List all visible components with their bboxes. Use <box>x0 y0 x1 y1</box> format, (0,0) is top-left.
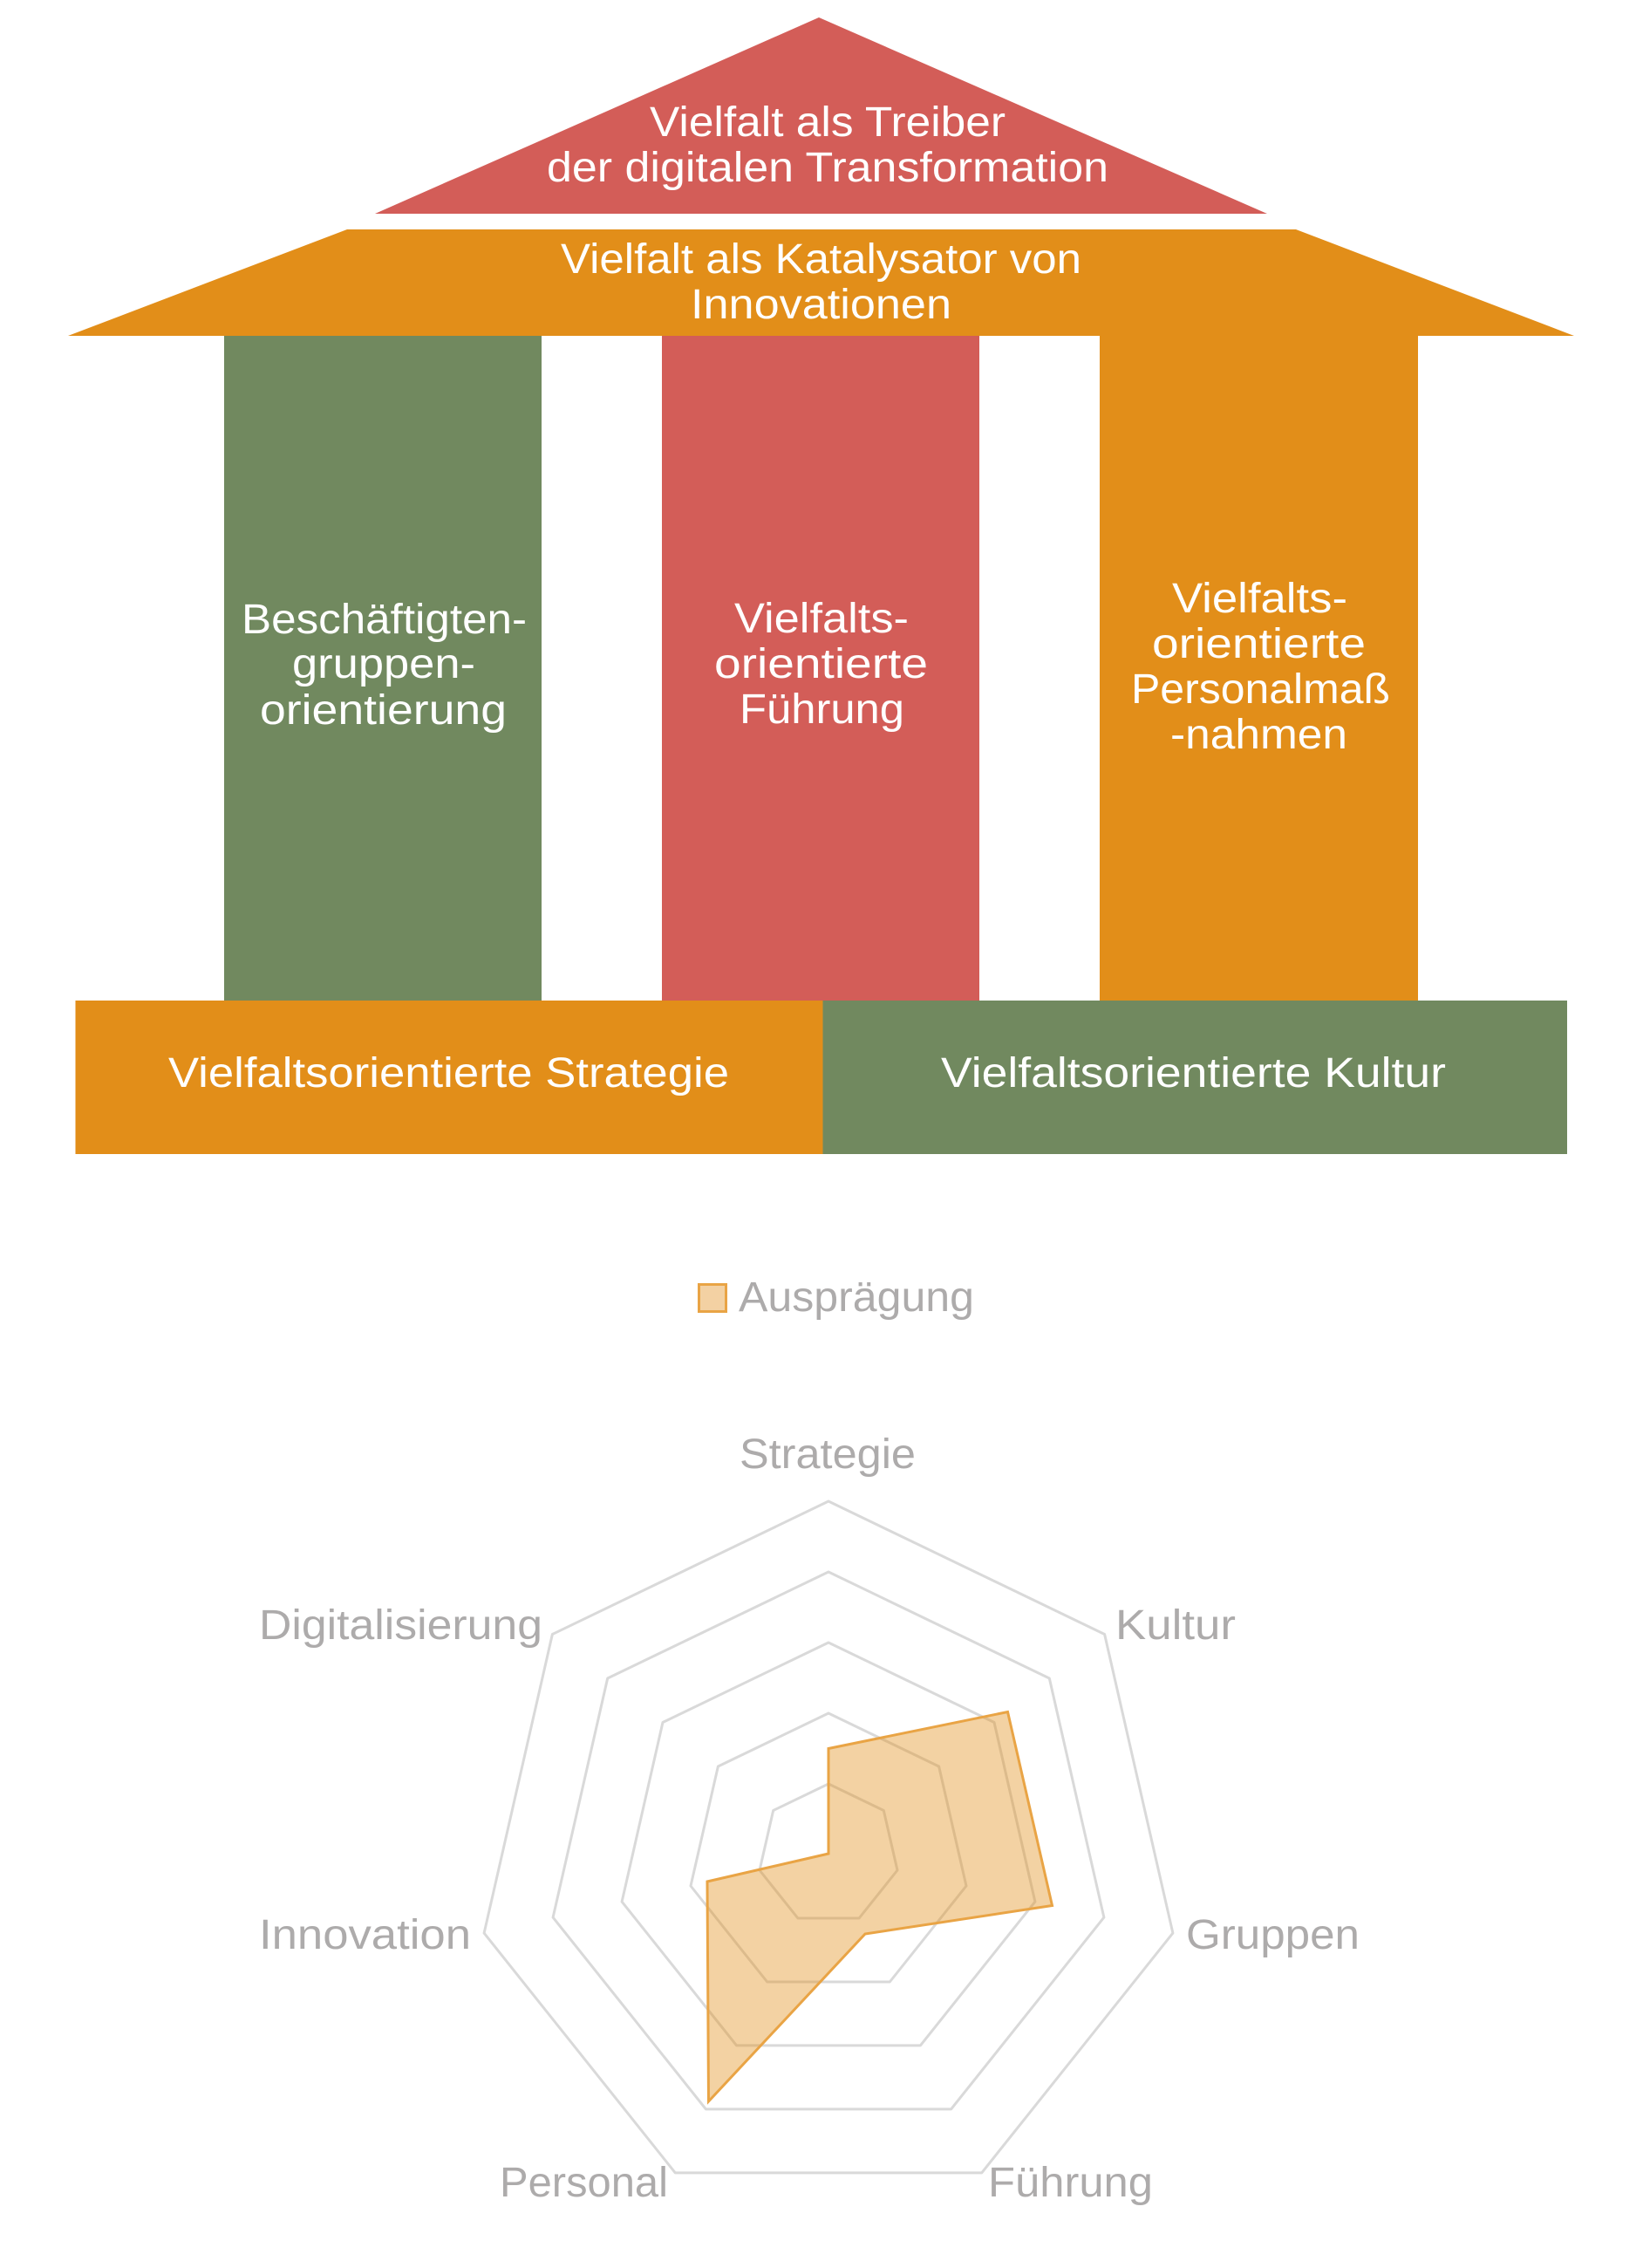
roof triangle: digital transformation: der digitalen Transformation <box>547 145 1108 191</box>
data polygon: Ausprägung <box>707 1711 1052 2101</box>
pillar: diversity-oriented HR measures: Vielfalts- <box>1172 576 1347 622</box>
axis label: Digitalisierung: Digitalisierung <box>259 1602 542 1649</box>
pillar: diversity-oriented leadership: Vielfalts- <box>734 596 909 642</box>
pillar: employee group orientation: gruppen- <box>292 641 475 687</box>
pillar: diversity-oriented leadership <box>662 336 979 1001</box>
roof triangle: digital transformation <box>375 17 1267 214</box>
panel: house diagram <box>68 17 1574 1154</box>
grid rings <box>484 1501 1173 2173</box>
axis label: Führung: Führung <box>988 2160 1153 2206</box>
foundation: culture: Vielfaltsorientierte Kultur <box>941 1050 1446 1096</box>
axis label: Kultur: Kultur <box>1115 1602 1236 1649</box>
roof beam: innovation catalyst: Innovationen <box>691 282 951 328</box>
pillar: employee group orientation: orientierung <box>260 687 507 734</box>
pillar: diversity-oriented leadership: orientierte <box>714 641 928 687</box>
pillar: diversity-oriented HR measures: Personalmaß <box>1131 666 1390 713</box>
radar chart <box>259 1431 1360 2206</box>
axis label: Gruppen: Gruppen <box>1186 1912 1360 1958</box>
roof triangle: digital transformation: Vielfalt als Treiber <box>650 99 1006 146</box>
axis label: Strategie: Strategie <box>740 1431 916 1478</box>
foundation: strategy <box>75 1001 823 1154</box>
foundation: strategy: Vielfaltsorientierte Strategie <box>168 1050 729 1096</box>
foundation: culture <box>823 1001 1567 1154</box>
legend: Ausprägung <box>739 1274 974 1321</box>
pillar: employee group orientation: Beschäftigten- <box>242 597 527 643</box>
pillar: diversity-oriented HR measures: -nahmen <box>1170 712 1347 758</box>
pillar: diversity-oriented leadership: Führung <box>740 687 904 733</box>
axis label: Innovation: Innovation <box>259 1912 471 1958</box>
axis label: Personal: Personal <box>500 2160 668 2206</box>
roof beam: innovation catalyst: Vielfalt als Katalysator von <box>561 236 1081 283</box>
roof beam: innovation catalyst <box>68 229 1574 336</box>
pillar: diversity-oriented HR measures <box>1100 336 1418 1001</box>
pillar: diversity-oriented HR measures: orientierte <box>1152 621 1366 667</box>
pillar: employee group orientation <box>224 336 542 1001</box>
